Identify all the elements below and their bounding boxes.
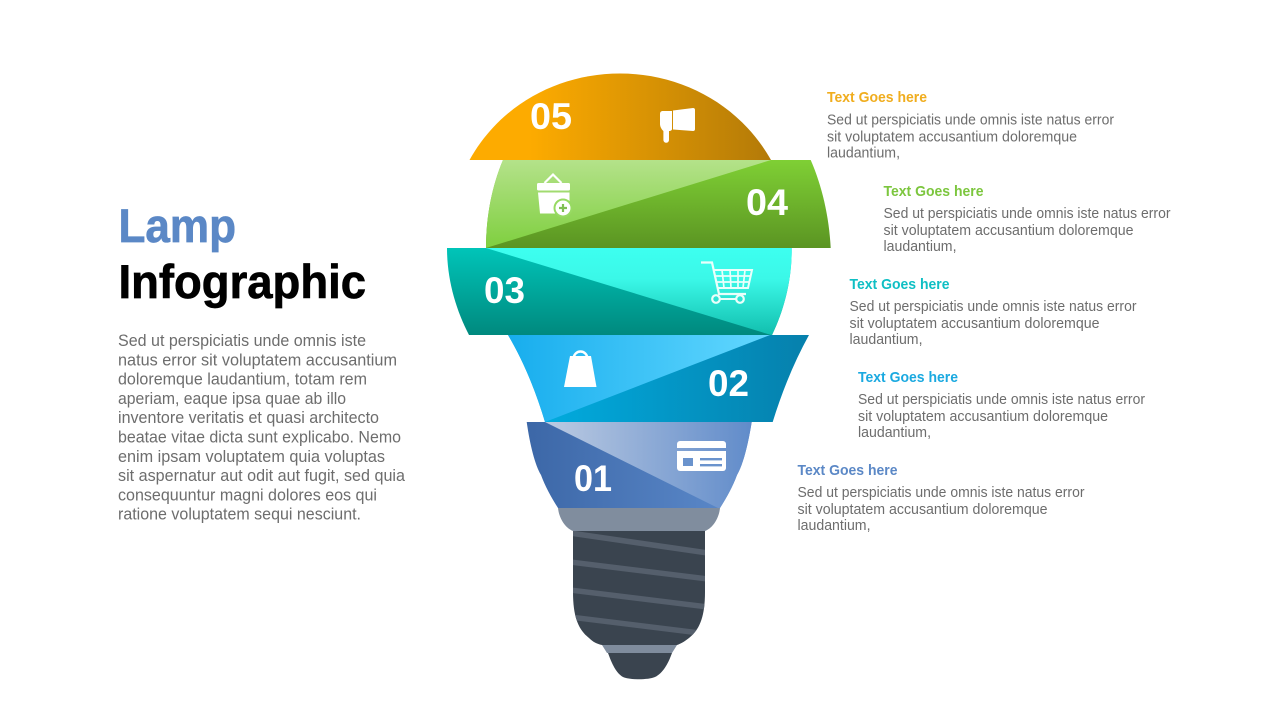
title <box>118 199 366 308</box>
callout 03 body: laudantium, <box>850 332 922 348</box>
intro paragraph: ratione voluptatem sequi nesciunt. <box>118 506 361 524</box>
intro paragraph: natus error sit voluptatem accusantium <box>118 351 397 369</box>
lamp base: collar <box>558 508 720 531</box>
intro paragraph: doloremque laudantium, totam rem <box>118 371 367 389</box>
callout 04 body <box>884 206 1171 255</box>
segment 04 <box>480 158 835 250</box>
number 02: 02 <box>708 363 749 404</box>
callout 01 body <box>798 485 1085 534</box>
callout 02 body <box>858 392 1145 441</box>
callout 02 body: Sed ut perspiciatis unde omnis iste natus error <box>858 392 1145 408</box>
title word: Lamp: Lamp <box>118 199 236 252</box>
intro paragraph: sit aspernatur aut odit aut fugit, sed quia <box>118 467 406 485</box>
intro paragraph <box>118 332 406 524</box>
segment 03 <box>440 246 800 338</box>
lamp base: screw thread <box>570 531 708 645</box>
callout 05 body: laudantium, <box>827 146 900 162</box>
callout 02 body: laudantium, <box>858 425 931 441</box>
number 01: 01 <box>574 458 612 499</box>
intro paragraph: aperiam, eaque ipsa quae ab illo <box>118 390 346 408</box>
segment 02 <box>500 333 815 425</box>
callout 03 body: sit voluptatem accusantium doloremque <box>850 316 1100 332</box>
number 05: 05 <box>530 96 572 137</box>
lamp base: tip <box>602 645 677 679</box>
title word: Infographic: Infographic <box>118 255 366 308</box>
callout 05 body <box>827 112 1114 162</box>
callout 04 heading: Text Goes here <box>884 183 984 200</box>
intro paragraph: consequuntur magni dolores eos qui <box>118 486 377 504</box>
callout 03 body: Sed ut perspiciatis unde omnis iste natus error <box>850 299 1137 315</box>
callout 03 body <box>850 299 1137 348</box>
icon: shopping cart <box>701 262 752 303</box>
callout 02 <box>858 369 1145 441</box>
callout 01 body: sit voluptatem accusantium doloremque <box>798 502 1048 518</box>
callout 01 body: laudantium, <box>798 518 870 534</box>
intro paragraph: beatae vitae dicta sunt explicabo. Nemo <box>118 428 401 446</box>
icon: megaphone <box>660 108 695 143</box>
callout 01 body: Sed ut perspiciatis unde omnis iste natus error <box>798 485 1085 501</box>
callout 05 body: Sed ut perspiciatis unde omnis iste natus error <box>827 112 1114 128</box>
callout 05 heading: Text Goes here <box>827 89 927 106</box>
callout 05 <box>827 89 1114 162</box>
callout 01 heading: Text Goes here <box>798 462 898 479</box>
callout 03 heading: Text Goes here <box>850 276 950 293</box>
number 03: 03 <box>484 270 525 311</box>
callout 04 body: laudantium, <box>884 239 956 255</box>
callout 05 body: sit voluptatem accusantium doloremque <box>827 129 1077 145</box>
callout 04 body: sit voluptatem accusantium doloremque <box>884 223 1134 239</box>
number 04: 04 <box>746 182 788 223</box>
callout 02 heading: Text Goes here <box>858 369 958 386</box>
callout 04 <box>884 183 1171 255</box>
callout 02 body: sit voluptatem accusantium doloremque <box>858 409 1108 425</box>
lamp infographic <box>440 74 835 679</box>
segment 01 <box>526 422 752 508</box>
icon: credit card <box>677 441 726 471</box>
callout 01 <box>798 462 1085 534</box>
callout 03 <box>850 276 1137 348</box>
segment 05 <box>470 74 771 160</box>
icon: shopping bag <box>564 352 596 387</box>
intro paragraph: enim ipsam voluptatem quia voluptas <box>118 448 385 466</box>
intro paragraph: inventore veritatis et quasi architecto <box>118 409 379 427</box>
callout 04 body: Sed ut perspiciatis unde omnis iste natus error <box>884 206 1171 222</box>
icon: basket with plus <box>537 174 572 218</box>
intro paragraph: Sed ut perspiciatis unde omnis iste <box>118 332 366 350</box>
